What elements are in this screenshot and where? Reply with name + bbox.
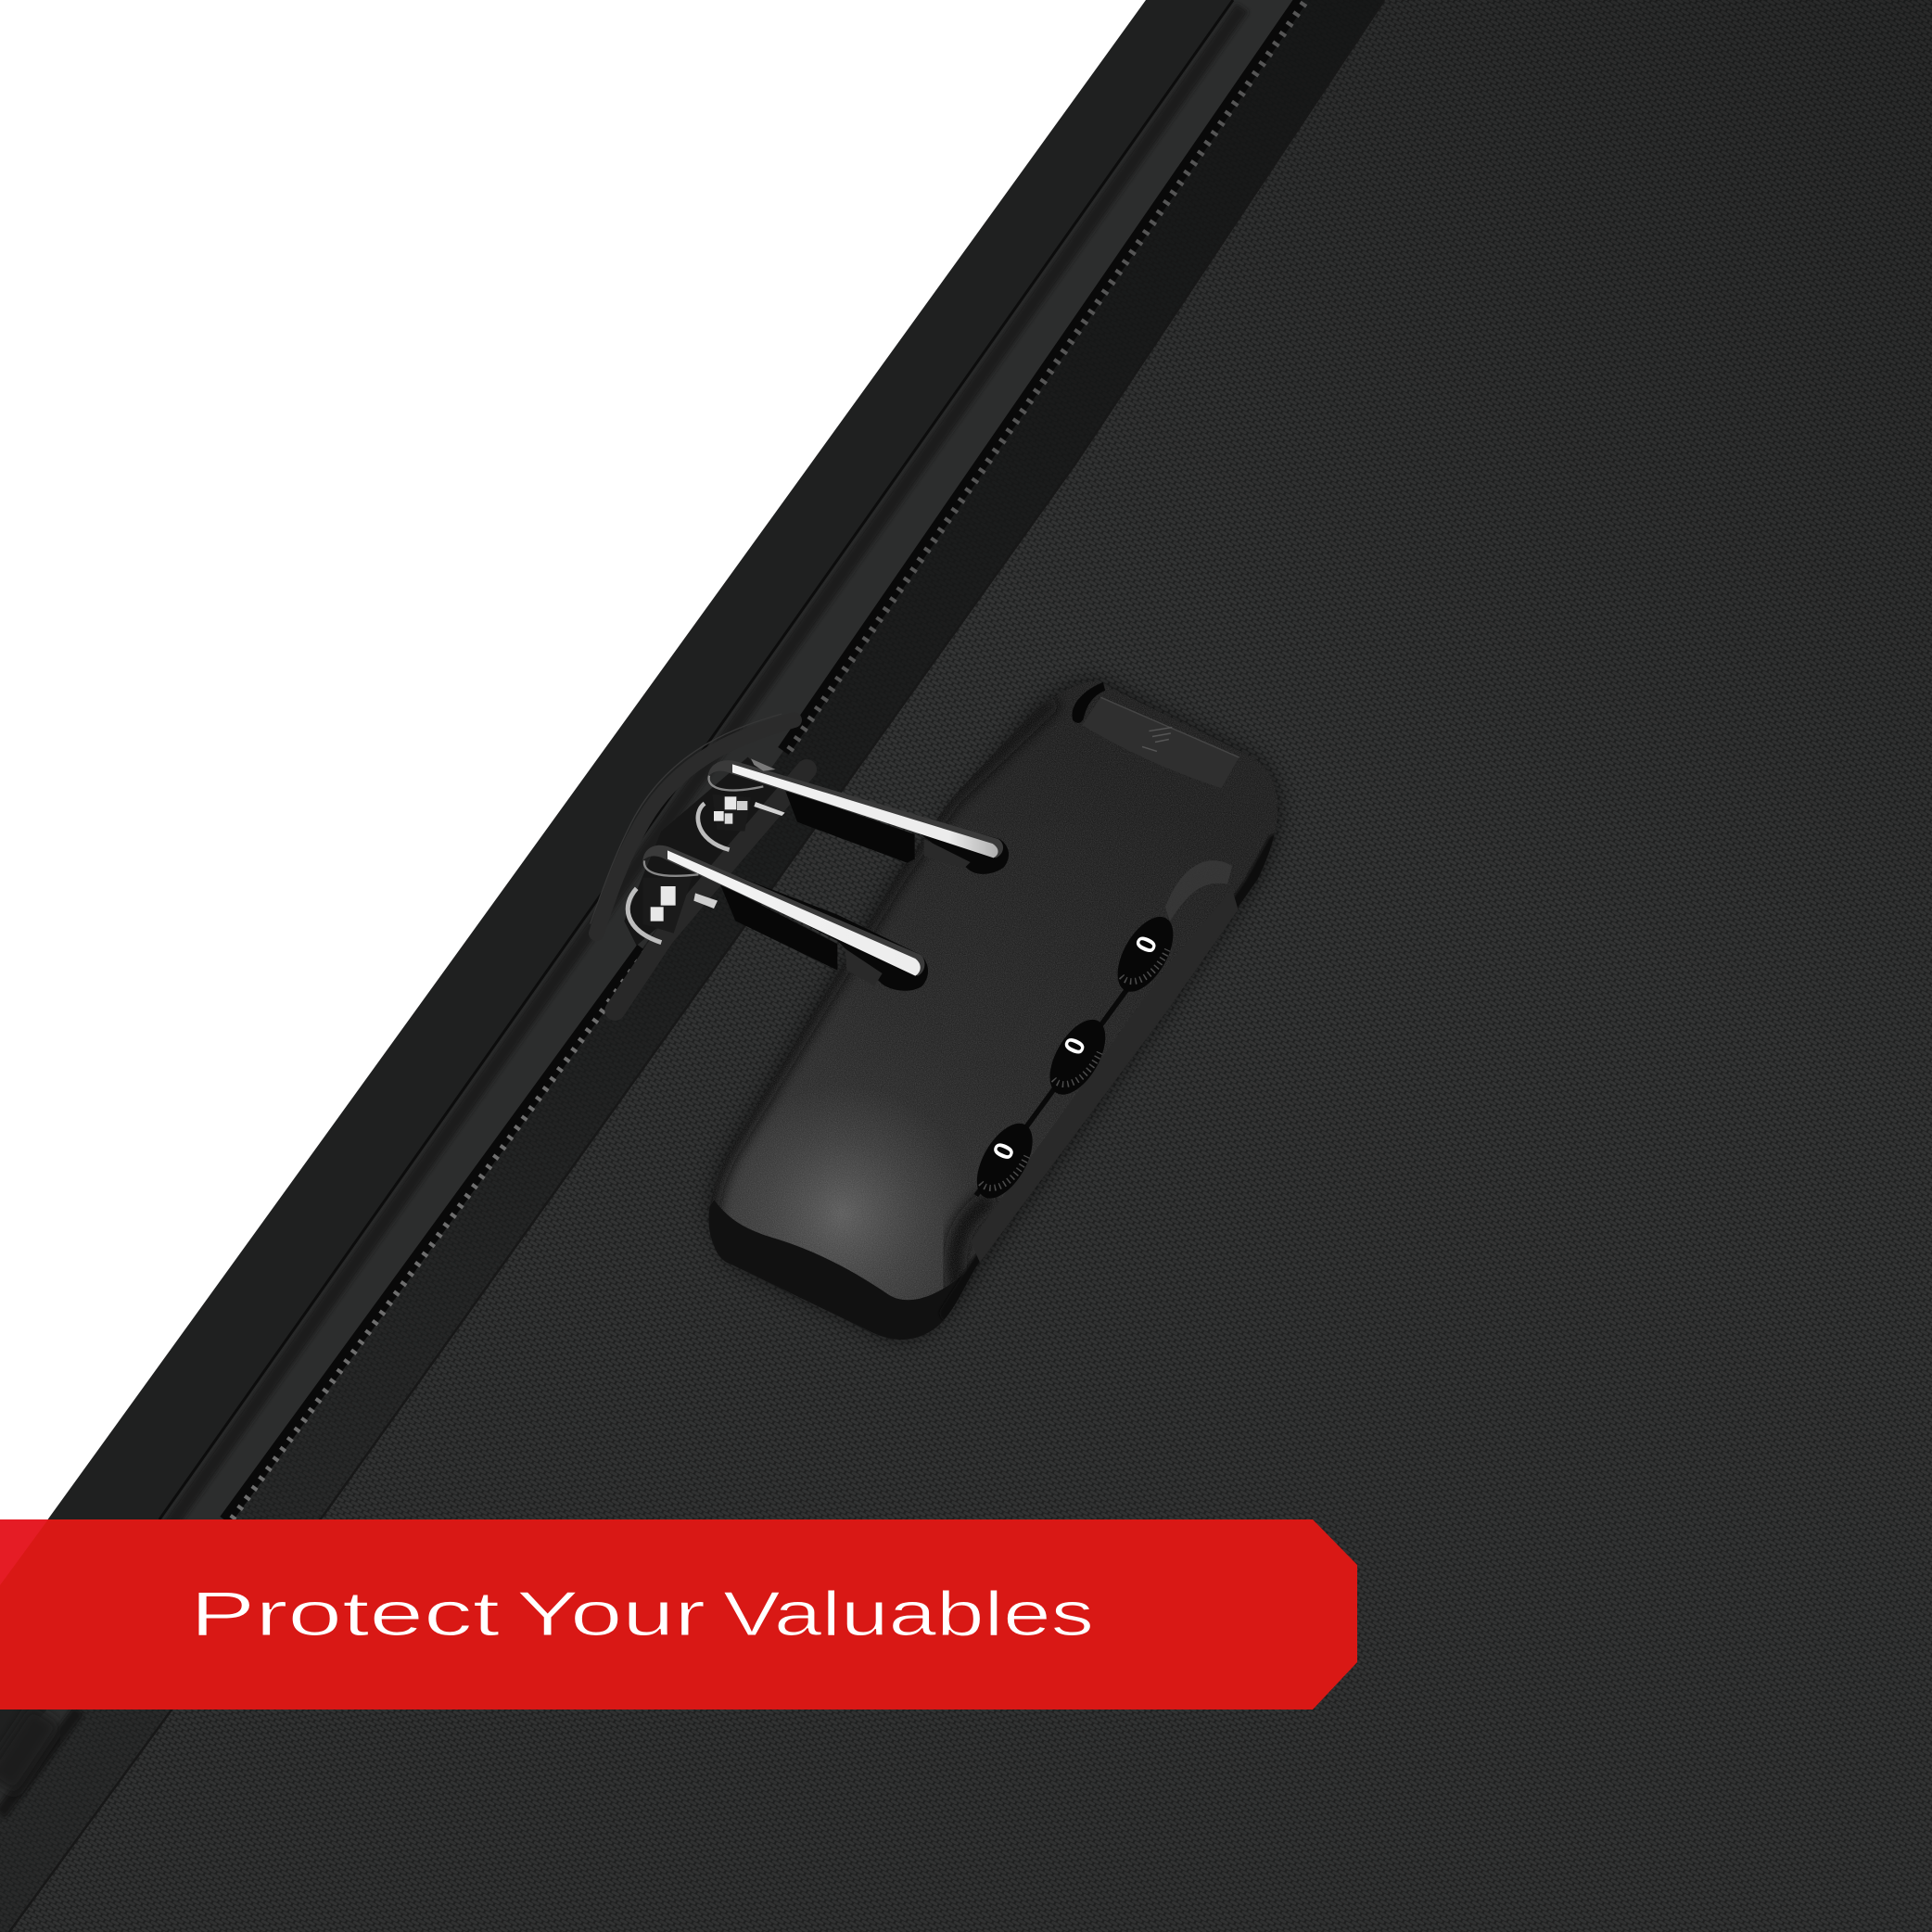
dial one — [1106, 908, 1185, 1001]
lower zipper puller — [628, 845, 928, 991]
dial two — [1038, 1010, 1117, 1104]
dial three: 0 — [985, 1138, 1020, 1164]
zipper teeth — [225, 0, 1304, 1523]
banner heading: Valuables — [723, 1579, 1094, 1649]
lock shaded surfaces — [699, 677, 1294, 1350]
lock right rim — [948, 843, 1276, 1313]
lock shoulder highlight — [1165, 860, 1232, 922]
banner heading: Protect — [190, 1579, 500, 1649]
dial two: 0 — [1057, 1032, 1091, 1059]
dial one: 0 — [1128, 931, 1163, 958]
lock slot — [1072, 682, 1105, 723]
dial three — [966, 1114, 1044, 1207]
stitched seam bands and leather trim — [0, 0, 1384, 1932]
upper zipper puller — [698, 758, 1009, 874]
dial groove strip — [971, 889, 1239, 1263]
red banner — [0, 1519, 1357, 1710]
lock body — [709, 681, 1277, 1340]
zipper fold under the pullers — [591, 714, 807, 1010]
white background corner — [0, 0, 1146, 1585]
banner heading — [190, 1579, 1094, 1649]
banner heading: Your — [516, 1579, 705, 1649]
release arrow icon — [1142, 728, 1172, 751]
lock bottom facet — [708, 1201, 962, 1340]
lock top release plate — [1082, 697, 1239, 788]
combination lock — [699, 677, 1294, 1350]
